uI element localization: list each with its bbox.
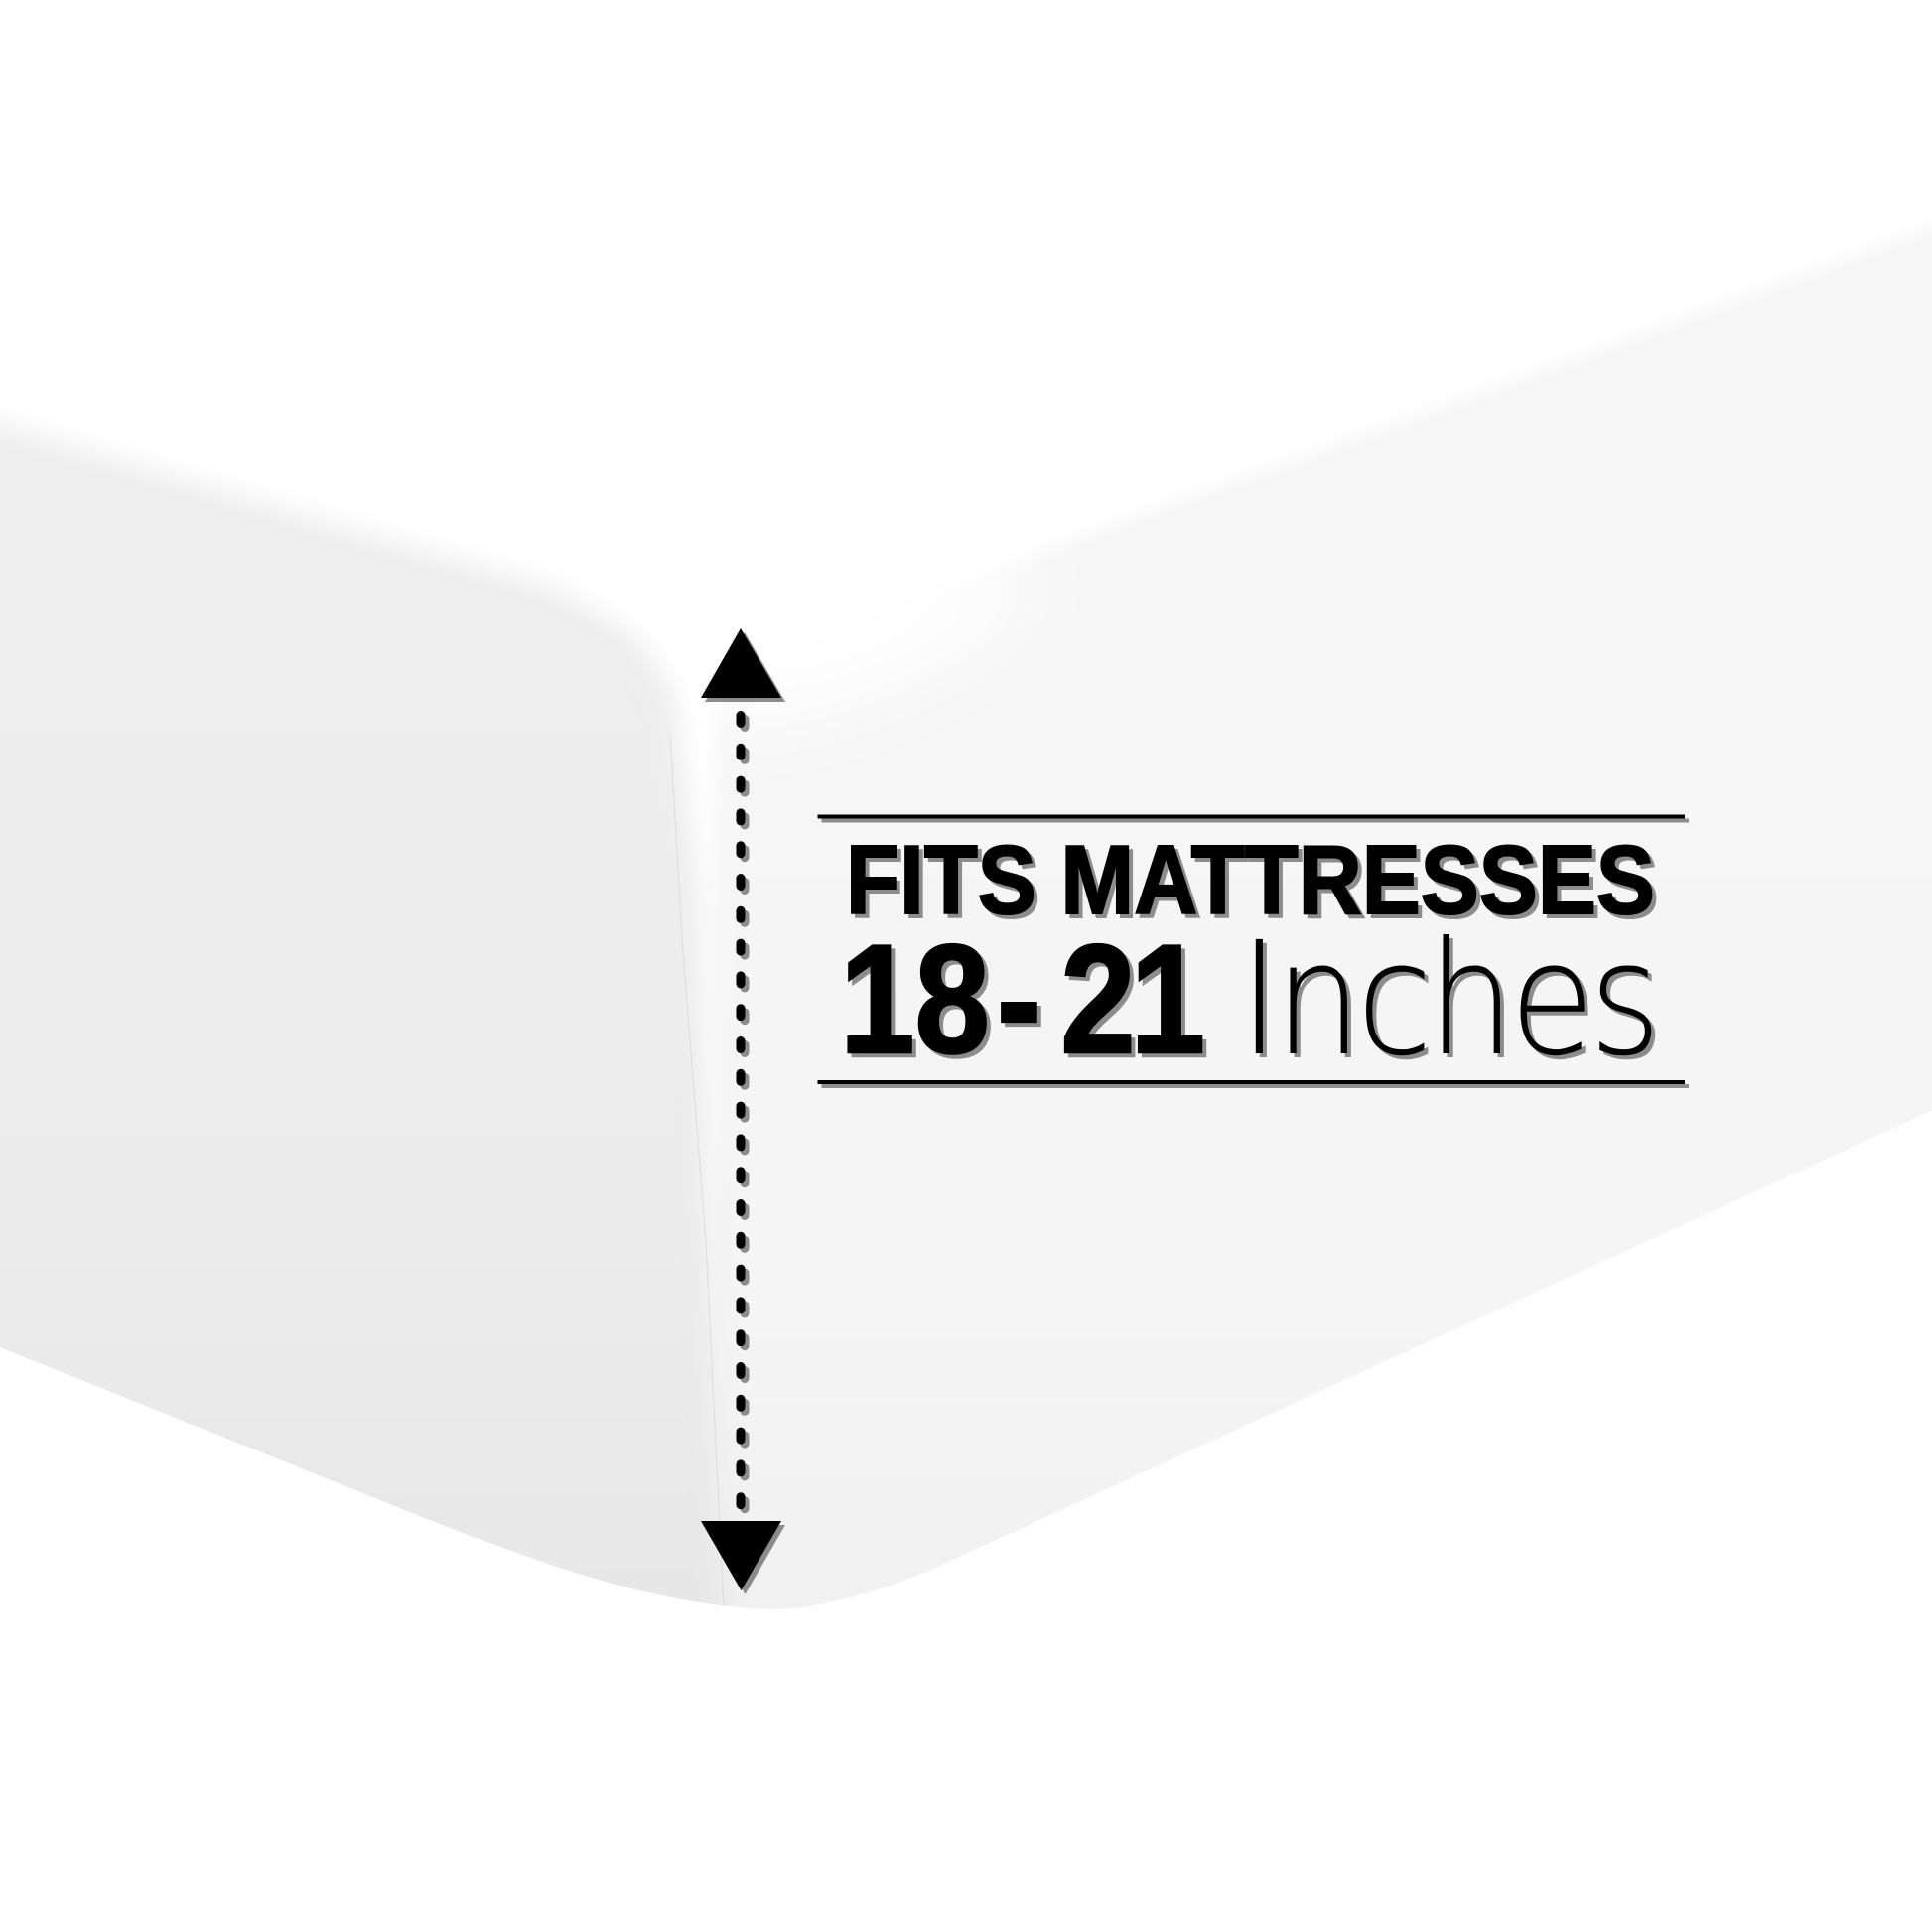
unit: inches: Inches xyxy=(1239,909,1656,1091)
depth range number: 18-21 xyxy=(840,912,1202,1085)
arrowhead down xyxy=(701,1521,781,1590)
right side face of mattress xyxy=(723,238,1932,1609)
callout: mattress fit xyxy=(818,814,1685,1091)
arrowhead up xyxy=(701,628,781,698)
heading: fits mattresses: FITS MATTRESSES xyxy=(846,825,1655,934)
height dimension arrow xyxy=(701,628,781,1590)
sheet seam xyxy=(670,735,724,1608)
bottom rule xyxy=(818,1080,1685,1084)
top rule xyxy=(818,814,1685,818)
left side face of mattress xyxy=(0,423,723,1605)
dotted line xyxy=(737,715,745,1505)
highlight near top corner xyxy=(656,515,1051,756)
mattress photo: white fitted sheet corner xyxy=(0,238,1932,1609)
